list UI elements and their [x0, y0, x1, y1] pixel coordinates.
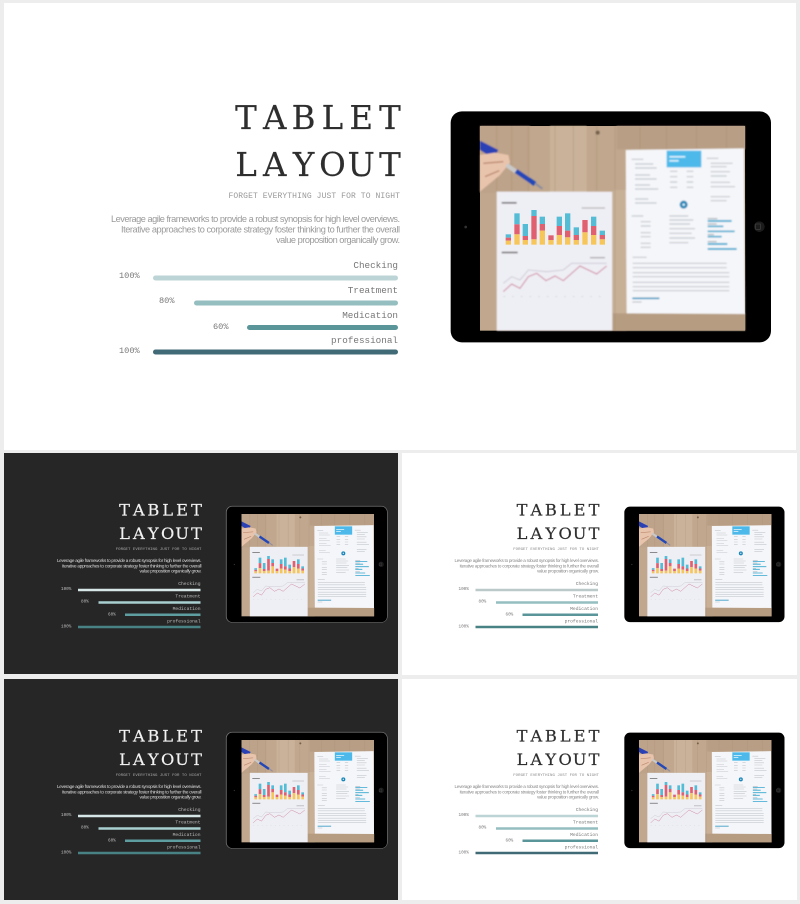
description: Iterative approaches to corporate strategy foster thinking to further the overall: [62, 563, 202, 568]
tablet: [226, 506, 387, 622]
subtitle: FORGET EVERYTHING JUST FOR TO NIGHT: [116, 774, 202, 778]
description text: value proposition organically grow.: [276, 235, 400, 245]
title: LAYOUT: [517, 524, 600, 543]
tablet: [226, 732, 387, 848]
description: [454, 784, 599, 800]
progress bars: Checking: [576, 581, 598, 587]
progress bars: 100%: [458, 624, 469, 630]
description: [57, 558, 202, 574]
description: [454, 558, 599, 574]
dark slide content: [57, 726, 387, 856]
title: TABLET: [119, 726, 202, 746]
description: Leverage agile frameworks to provide a robust synopsis for high level overviews.: [57, 784, 202, 789]
panel: dark slide bottom: [4, 679, 398, 900]
white slide content: [454, 500, 784, 630]
description: value proposition organically grow.: [537, 568, 599, 574]
description text: Iterative approaches to corporate strategy foster thinking to further the overall: [121, 224, 400, 234]
title: tablet layout: [235, 99, 401, 184]
description: Iterative approaches to corporate strategy foster thinking to further the overall: [460, 789, 599, 794]
progress bars: 100%: [458, 850, 469, 856]
progress bars: Treatment: [175, 594, 201, 600]
progress: medication: [213, 310, 398, 332]
progress: checking: 100%: [119, 271, 140, 281]
progress bars: 80%: [81, 600, 89, 604]
title: TABLET: [517, 500, 600, 520]
tablet: [624, 733, 784, 848]
description: [57, 784, 202, 800]
progress: treatment: 80%: [159, 296, 175, 306]
title: tablet layout: LAYOUT: [235, 146, 401, 184]
subtitle: FORGET EVERYTHING JUST FOR TO NIGHT: [513, 548, 600, 552]
tablet mockup: [451, 111, 771, 342]
dark slide content: [57, 500, 387, 630]
progress: medication: Medication: [342, 310, 398, 321]
panel: white slide bottom: [402, 679, 797, 900]
progress: professional: 100%: [119, 346, 140, 356]
panel: dark slide top: [4, 453, 398, 674]
progress bars: 60%: [506, 838, 514, 844]
progress bars: 100%: [458, 813, 469, 818]
progress bars: 60%: [108, 838, 116, 844]
progress bars: Medication: [570, 832, 598, 838]
progress bars: 60%: [506, 612, 514, 618]
progress: checking: [119, 260, 398, 281]
progress bars: Medication: [570, 606, 598, 612]
title: [517, 726, 600, 769]
progress: treatment: [159, 285, 398, 306]
description text: [111, 214, 400, 245]
title: [517, 500, 600, 543]
progress bars: Treatment: [573, 820, 598, 826]
panel: white slide top: [402, 453, 797, 675]
progress bars: 100%: [61, 624, 72, 630]
progress bars: [61, 581, 201, 630]
progress bars: 80%: [478, 826, 487, 830]
subtitle: FORGET EVERYTHING JUST FOR TO NIGHT: [228, 192, 400, 201]
panel: large white slide: [4, 3, 796, 450]
progress bars: professional: [565, 618, 598, 624]
progress bars: Checking: [178, 807, 201, 813]
title: tablet layout: TABLET: [235, 99, 401, 137]
description: Leverage agile frameworks to provide a robust synopsis for high level overviews.: [57, 558, 202, 563]
progress: treatment: Treatment: [348, 285, 398, 296]
progress: medication: 60%: [213, 322, 229, 332]
white slide content: [454, 726, 784, 856]
progress bars: professional: [565, 844, 598, 850]
progress bars: 100%: [61, 813, 72, 818]
description: value proposition organically grow.: [140, 794, 202, 800]
description text: Leverage agile frameworks to provide a robust synopsis for high level overviews.: [111, 214, 400, 224]
title: TABLET: [119, 500, 202, 520]
title: LAYOUT: [119, 750, 202, 769]
title: [119, 726, 202, 769]
progress bars: 100%: [458, 587, 469, 592]
progress bars: 60%: [108, 612, 116, 618]
progress bars: [458, 581, 598, 630]
title: LAYOUT: [517, 750, 600, 769]
description: Leverage agile frameworks to provide a robust synopsis for high level overviews.: [454, 784, 599, 789]
description: Leverage agile frameworks to provide a robust synopsis for high level overviews.: [454, 558, 599, 563]
progress bars: 100%: [61, 587, 72, 592]
description: value proposition organically grow.: [140, 568, 202, 574]
subtitle: FORGET EVERYTHING JUST FOR TO NIGHT: [116, 548, 202, 552]
description: Iterative approaches to corporate strategy foster thinking to further the overall: [460, 563, 599, 568]
progress bars: Medication: [173, 832, 201, 838]
title: [119, 500, 202, 543]
progress bars: 80%: [81, 826, 89, 830]
progress bars: 100%: [61, 850, 72, 856]
tablet: [624, 507, 784, 622]
progress bars: [61, 807, 201, 856]
description: Iterative approaches to corporate strategy foster thinking to further the overall: [62, 789, 202, 794]
progress bars: Medication: [173, 606, 201, 612]
progress bars: [458, 807, 598, 856]
progress bars: 80%: [478, 600, 487, 604]
progress bars: Treatment: [573, 594, 598, 600]
progress bars: professional: [167, 618, 201, 624]
description: value proposition organically grow.: [537, 794, 599, 800]
progress bars: professional: [167, 844, 201, 850]
progress: checking: Checking: [353, 260, 398, 271]
subtitle: FORGET EVERYTHING JUST FOR TO NIGHT: [513, 774, 600, 778]
progress bars: Treatment: [175, 820, 201, 826]
progress: professional: [119, 335, 398, 356]
progress: professional: professional: [331, 335, 398, 346]
title: LAYOUT: [119, 524, 202, 543]
progress bars: Checking: [178, 581, 201, 587]
title: TABLET: [517, 726, 600, 746]
progress bars: Checking: [576, 807, 598, 813]
